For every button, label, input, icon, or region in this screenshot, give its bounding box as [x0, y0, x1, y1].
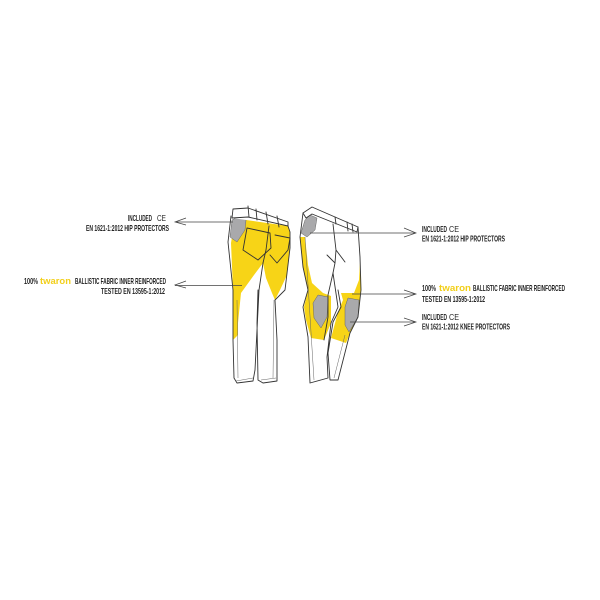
- jeans: front view: [300, 207, 361, 383]
- label: rear hip protector: [86, 213, 169, 233]
- arrow: knee protector: [350, 318, 416, 326]
- waistband: rear: [232, 208, 288, 226]
- rear outline: [228, 216, 290, 383]
- ballistic fabric: outer thigh and knee: [300, 237, 331, 340]
- label: knee protector: INCLUDED: [422, 312, 447, 322]
- knee protectors: [313, 295, 328, 328]
- label: front hip protector: [422, 224, 505, 244]
- waistband: front: [303, 207, 358, 232]
- hip protector: rear: [230, 215, 246, 242]
- label: front hip protector: INCLUDED: [422, 224, 447, 234]
- label: rear ballistic fabric: BALLISTIC FABRIC INNER REINFORCED: [75, 276, 166, 286]
- label: front hip protector: CE: [449, 224, 459, 234]
- label: front ballistic fabric: TESTED EN 13595-1:2012: [422, 294, 485, 304]
- label: rear ballistic fabric: twaron: [40, 276, 71, 286]
- label: rear ballistic fabric: TESTED EN 13595-1:2012: [101, 286, 165, 296]
- label: rear ballistic fabric: [24, 276, 166, 296]
- front outline: [300, 213, 361, 383]
- label: front ballistic fabric: [422, 283, 565, 304]
- jeans: rear view: [228, 206, 290, 383]
- arrow: front hip protector: [310, 228, 416, 237]
- ballistic fabric: rear: [231, 217, 290, 340]
- arrow: rear ballistic fabric: [175, 281, 242, 288]
- back pockets: [243, 228, 271, 260]
- label: knee protector: EN 1621-1:2012 KNEE PROTECTORS: [422, 322, 510, 332]
- silhouette fill: [228, 216, 290, 383]
- label: knee protector: CE: [449, 312, 459, 322]
- label: front ballistic fabric: twaron: [439, 283, 471, 293]
- label: front ballistic fabric: 100%: [422, 283, 436, 293]
- label: rear hip protector: CE: [157, 213, 166, 223]
- hip protector: front: [301, 215, 317, 237]
- label: rear ballistic fabric: 100%: [24, 276, 38, 286]
- arrow: rear hip protector: [175, 218, 233, 225]
- label: rear hip protector: EN 1621-1:2012 HIP PROTECTORS: [86, 223, 169, 233]
- silhouette fill: [300, 207, 360, 383]
- label: rear hip protector: INCLUDED: [128, 213, 152, 223]
- label: knee protector: [422, 312, 510, 332]
- label: front hip protector: EN 1621-1:2012 HIP PROTECTORS: [422, 234, 505, 244]
- arrow: front ballistic fabric: [352, 290, 416, 298]
